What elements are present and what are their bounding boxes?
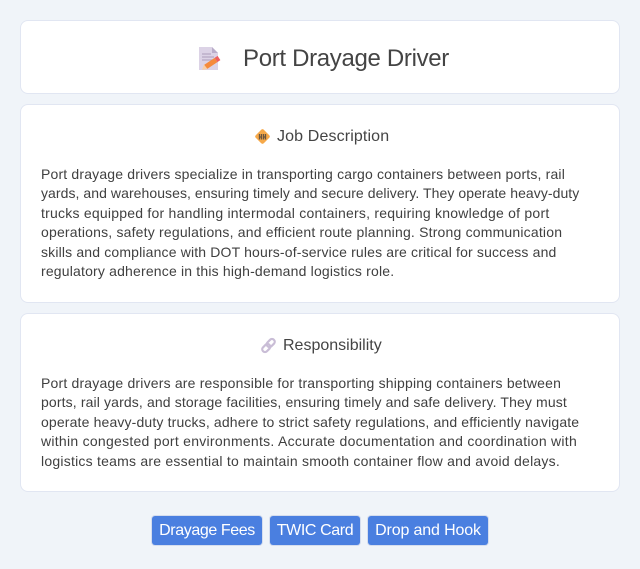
icon: document with pencil [199,47,220,70]
icon: link [261,338,276,354]
heading: responsibility: Responsibility [283,337,382,354]
text block: job description: regulatory adherence in this high-demand logistics role. [41,263,394,279]
tag: twic card: TWIC Card [277,522,353,539]
text block: responsibility: within congested port environments. Accurate documentation and coordination with [41,433,577,449]
text block: job description: Port drayage drivers specialize in transporting cargo containers between ports, rail [41,166,565,182]
tag: drop and hook [368,516,488,545]
tag: drayage fees: Drayage Fees [159,522,255,539]
panel: responsibility [20,313,620,492]
tag: drayage fees [152,516,262,545]
tag: twic card [270,516,360,545]
text block: job description: yards, and warehouses, ensuring timely and secure delivery. They operate heavy-duty [41,185,579,201]
text block: responsibility: ports, rail yards, and storage facilities, ensuring timely and safe delivery. They must [41,394,567,410]
text block: responsibility: Port drayage drivers are responsible for transporting shipping containers between [41,375,561,391]
text block: job description: skills and compliance with DOT hours-of-service rules are critical for success and [41,244,556,260]
heading: job description: Job Description [277,128,389,145]
panel: title card [20,20,620,94]
panel: job description [20,104,620,303]
text block: job description: trucks equipped for handling intermodal containers, requiring knowledge of port [41,205,549,221]
title: Port Drayage Driver [243,45,449,72]
text block: job description [41,166,580,279]
text block: responsibility: logistics teams are essential to maintain smooth container flow and avoid delays. [41,453,560,469]
text block: responsibility [41,375,579,469]
text block: job description: operations, safety regulations, and efficient route planning. Strong communication [41,224,562,240]
icon: construction diamond sign [255,129,270,144]
tag: drop and hook: Drop and Hook [375,522,481,539]
text block: responsibility: operate heavy-duty trucks, adhere to strict safety regulations, and efficiently navigate [41,414,579,430]
